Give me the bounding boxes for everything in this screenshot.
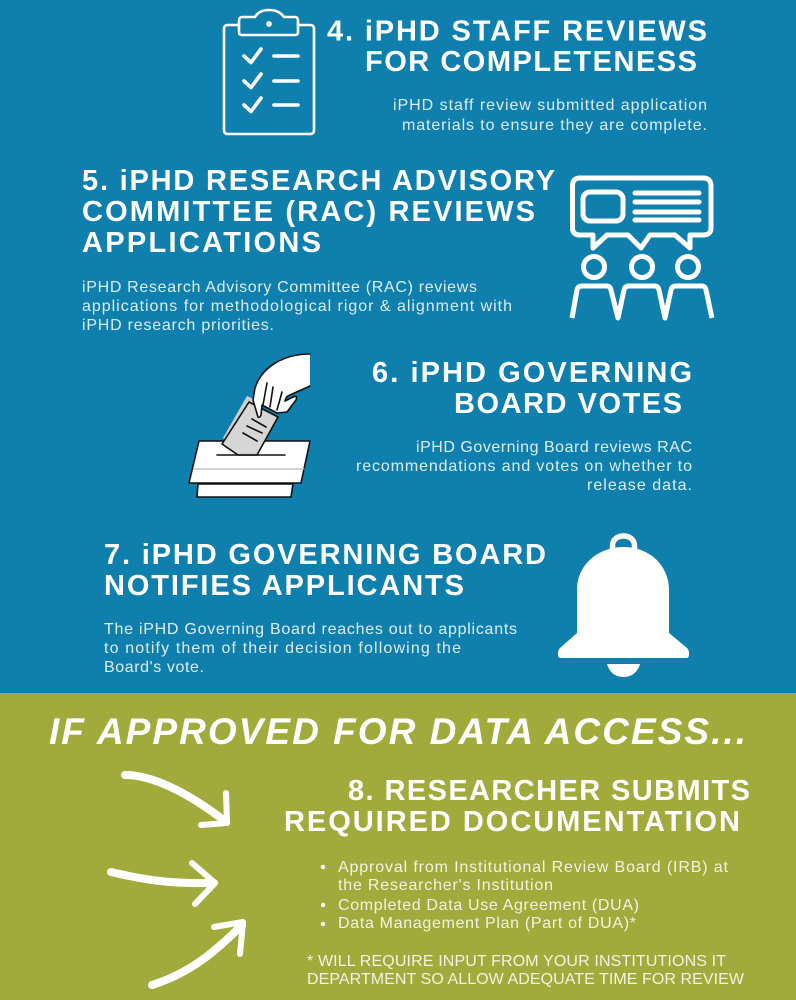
text: step 6 description: [356, 439, 692, 494]
panel: step 4: [224, 10, 707, 134]
icon: committee with speech bubble: [572, 178, 712, 318]
text: step 5 description: [82, 279, 512, 334]
heading: step 4: [327, 16, 707, 78]
heading: step 5: APPLICATIONS: [82, 227, 321, 259]
heading: step 8: REQUIRED DOCUMENTATION: [284, 806, 740, 838]
icon: bell: [558, 536, 689, 677]
heading: step 5: [82, 165, 555, 259]
arrow: middle: [111, 863, 215, 904]
text: footnote: * WILL REQUIRE INPUT FROM YOUR INSTITUTIONS IT: [307, 953, 726, 970]
text: step 7 description: [104, 621, 517, 676]
heading: step 7: NOTIFIES APPLICANTS: [104, 570, 464, 602]
text: step 7 description: Board's vote.: [104, 659, 204, 676]
panel: blue background: [0, 0, 796, 693]
heading: if approved for data access: IF APPROVED FOR DATA ACCESS...: [49, 711, 746, 752]
panel: step 7: [104, 536, 689, 677]
panel: step 6: [189, 354, 692, 497]
arrow: top: [125, 775, 227, 825]
text: step 4 description: materials to ensure they are complete.: [402, 117, 707, 134]
heading: step 8: [284, 775, 750, 838]
heading: step 4: 4. iPHD STAFF REVIEWS: [327, 16, 707, 48]
icon: hand casting ballot: [189, 354, 310, 497]
text: footnote: DEPARTMENT SO ALLOW ADEQUATE TIME FOR REVIEW: [307, 971, 745, 988]
text: step 5 description: iPHD Research Advisory Committee (RAC) reviews: [82, 279, 477, 296]
list: required documents: Approval from Institutional Review Board (IRB) at: [338, 859, 729, 876]
heading: step 6: 6. iPHD GOVERNING: [372, 357, 692, 389]
heading: step 7: 7. iPHD GOVERNING BOARD: [104, 539, 546, 571]
panel: step 5: [82, 165, 712, 334]
heading: step 5: COMMITTEE (RAC) REVIEWS: [82, 196, 535, 228]
panel: approved section: [49, 711, 750, 988]
text: step 6 description: recommendations and votes on whether to: [356, 458, 692, 475]
heading: step 6: [372, 357, 692, 420]
list: required documents: [321, 859, 729, 932]
text: step 4 description: [393, 97, 707, 134]
text: step 5 description: iPHD research priorities.: [82, 317, 274, 334]
list: required documents: Data Management Plan (Part of DUA)*: [338, 915, 636, 932]
text: step 6 description: release data.: [587, 477, 692, 494]
arrow: bottom: [152, 922, 243, 985]
panel: green background: [0, 693, 796, 1000]
text: step 7 description: The iPHD Governing Board reaches out to applicants: [104, 621, 517, 638]
list: required documents: Completed Data Use Agreement (DUA): [338, 897, 639, 914]
text: step 4 description: iPHD staff review submitted application: [393, 97, 707, 114]
heading: step 6: BOARD VOTES: [454, 388, 682, 420]
list: required documents: the Researcher's Institution: [338, 877, 553, 894]
icon: clipboard checklist: [224, 10, 314, 134]
heading: step 7: [104, 539, 546, 602]
text: step 5 description: applications for methodological rigor & alignment with: [82, 298, 512, 315]
text: step 6 description: iPHD Governing Board reviews RAC: [416, 439, 692, 456]
heading: step 4: FOR COMPLETENESS: [365, 46, 697, 78]
text: footnote: [307, 953, 745, 988]
text: step 7 description: to notify them of their decision following the: [104, 640, 461, 657]
heading: step 5: 5. iPHD RESEARCH ADVISORY: [82, 165, 555, 197]
heading: step 8: 8. RESEARCHER SUBMITS: [348, 775, 750, 807]
